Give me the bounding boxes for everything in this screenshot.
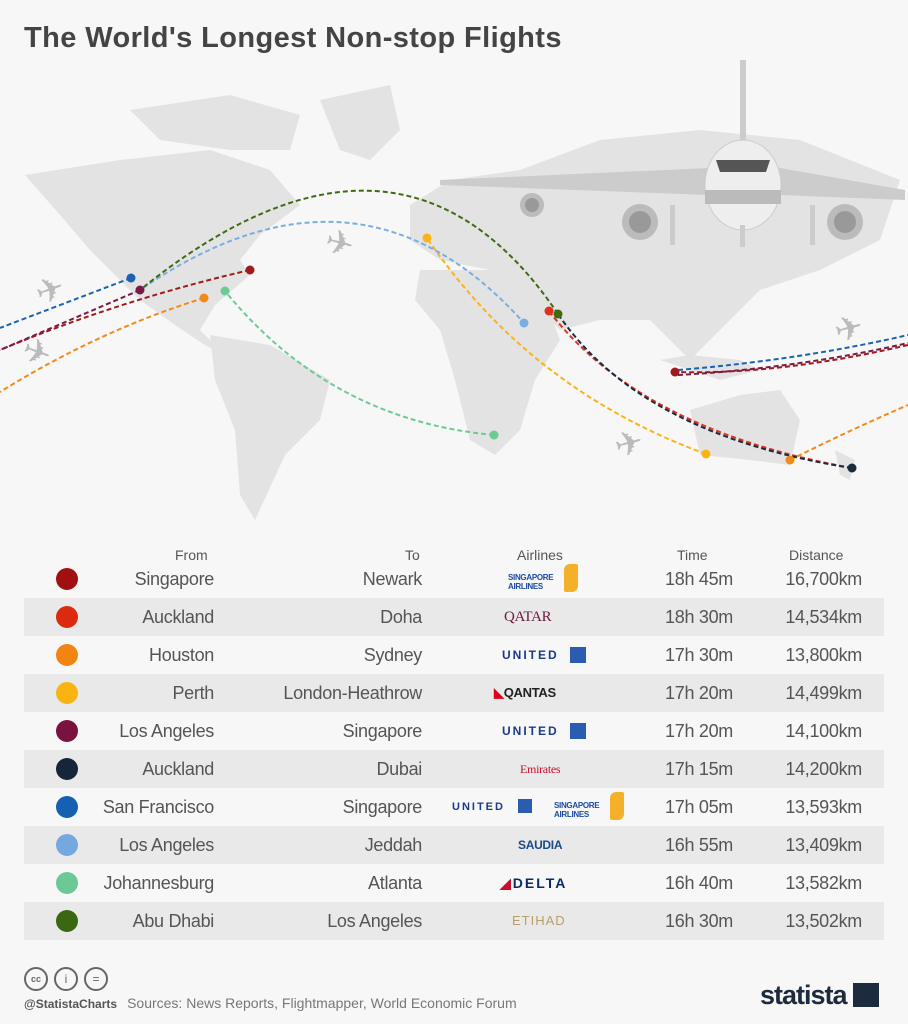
row 10: Abu Dhabi	[133, 911, 214, 931]
row 6: Dubai	[376, 759, 422, 779]
row 9: Johannesburg	[104, 873, 214, 893]
map with flight routes	[0, 60, 908, 520]
row 1: SINGAPORE	[508, 573, 553, 582]
row 2: Auckland	[142, 607, 214, 627]
icon: large airplane	[440, 60, 905, 247]
row 5: Los Angeles	[119, 721, 214, 741]
row 5	[56, 720, 862, 742]
row 1: Newark	[363, 569, 422, 589]
row 9	[56, 872, 862, 894]
row 10: 16h 30m	[665, 911, 733, 931]
row 3: Houston	[149, 645, 214, 665]
row 3: 17h 30m	[665, 645, 733, 665]
row 6: Emirates	[520, 762, 560, 776]
row 9: ◢DELTA	[500, 875, 567, 891]
row 3	[56, 644, 862, 666]
row 3: 13,800km	[785, 645, 862, 665]
icon: creative commons	[24, 967, 108, 991]
row 7	[56, 792, 862, 820]
icon: small airplanes: ✈	[30, 268, 70, 313]
row 1	[56, 564, 862, 592]
row 5: 17h 20m	[665, 721, 733, 741]
flight routes	[0, 191, 908, 468]
icon: creative commons: cc	[31, 974, 41, 984]
row 7: Singapore	[343, 797, 422, 817]
footer: sources: @StatistaCharts Sources: News Reports, Flightmapper, World Economic Forum	[24, 995, 517, 1011]
row 10	[24, 902, 884, 940]
logo: statista: statista	[760, 980, 847, 1010]
row 10: Los Angeles	[327, 911, 422, 931]
row 9: Atlanta	[368, 873, 422, 893]
row 9: 13,582km	[785, 873, 862, 893]
row 6: Auckland	[142, 759, 214, 779]
icon: small airplanes: ✈	[321, 222, 358, 266]
row 2: 18h 30m	[665, 607, 733, 627]
row 7: San Francisco	[103, 797, 214, 817]
row 8: Los Angeles	[119, 835, 214, 855]
row 3: UNITED	[502, 648, 559, 662]
row 1: AIRLINES	[508, 582, 543, 591]
table rows	[24, 564, 884, 940]
row 7: UNITED	[452, 801, 505, 813]
icon: small airplanes: ✈	[830, 307, 868, 351]
icon: small airplanes	[17, 222, 868, 466]
row 4: 14,499km	[785, 683, 862, 703]
row 4: Perth	[172, 683, 214, 703]
row 6	[24, 750, 884, 788]
icon: small airplanes: ✈	[610, 422, 648, 466]
row 2: Doha	[380, 607, 422, 627]
row 2	[24, 598, 884, 636]
row 2: QATAR	[504, 609, 551, 625]
row 10: 13,502km	[785, 911, 862, 931]
icon: creative commons: =	[92, 972, 100, 986]
row 6: 17h 15m	[665, 759, 733, 779]
row 9: 16h 40m	[665, 873, 733, 893]
row 6: 14,200km	[785, 759, 862, 779]
row 2: 14,534km	[785, 607, 862, 627]
row 7: AIRLINES	[554, 810, 589, 819]
icon: small airplanes: ✈	[17, 330, 57, 376]
row 4: 17h 20m	[665, 683, 733, 703]
row 5: Singapore	[343, 721, 422, 741]
text: Airlines	[517, 547, 563, 563]
world map continents	[25, 85, 900, 520]
row 5: UNITED	[502, 724, 559, 738]
row 8: 16h 55m	[665, 835, 733, 855]
text: Time	[677, 547, 708, 563]
row 8: Jeddah	[365, 835, 422, 855]
row 1: Singapore	[135, 569, 214, 589]
row 8: SAUDIA	[518, 838, 562, 852]
row 4: London-Heathrow	[283, 683, 422, 703]
row 4	[24, 674, 884, 712]
row 7: 17h 05m	[665, 797, 733, 817]
row 5: 14,100km	[785, 721, 862, 741]
row 3: Sydney	[364, 645, 422, 665]
row 1: 16,700km	[785, 569, 862, 589]
text: Distance	[789, 547, 843, 563]
row 8: 13,409km	[785, 835, 862, 855]
row 7: 13,593km	[785, 797, 862, 817]
row 8	[24, 826, 884, 864]
icon: creative commons: i	[65, 972, 67, 986]
row 7: SINGAPORE	[554, 801, 599, 810]
row 1: 18h 45m	[665, 569, 733, 589]
title: The World's Longest Non-stop Flights	[24, 22, 562, 54]
text: To	[405, 547, 420, 563]
table headers: From	[175, 547, 208, 563]
row 10: ETIHAD	[512, 913, 566, 928]
row 4: ◣QANTAS	[494, 685, 556, 700]
